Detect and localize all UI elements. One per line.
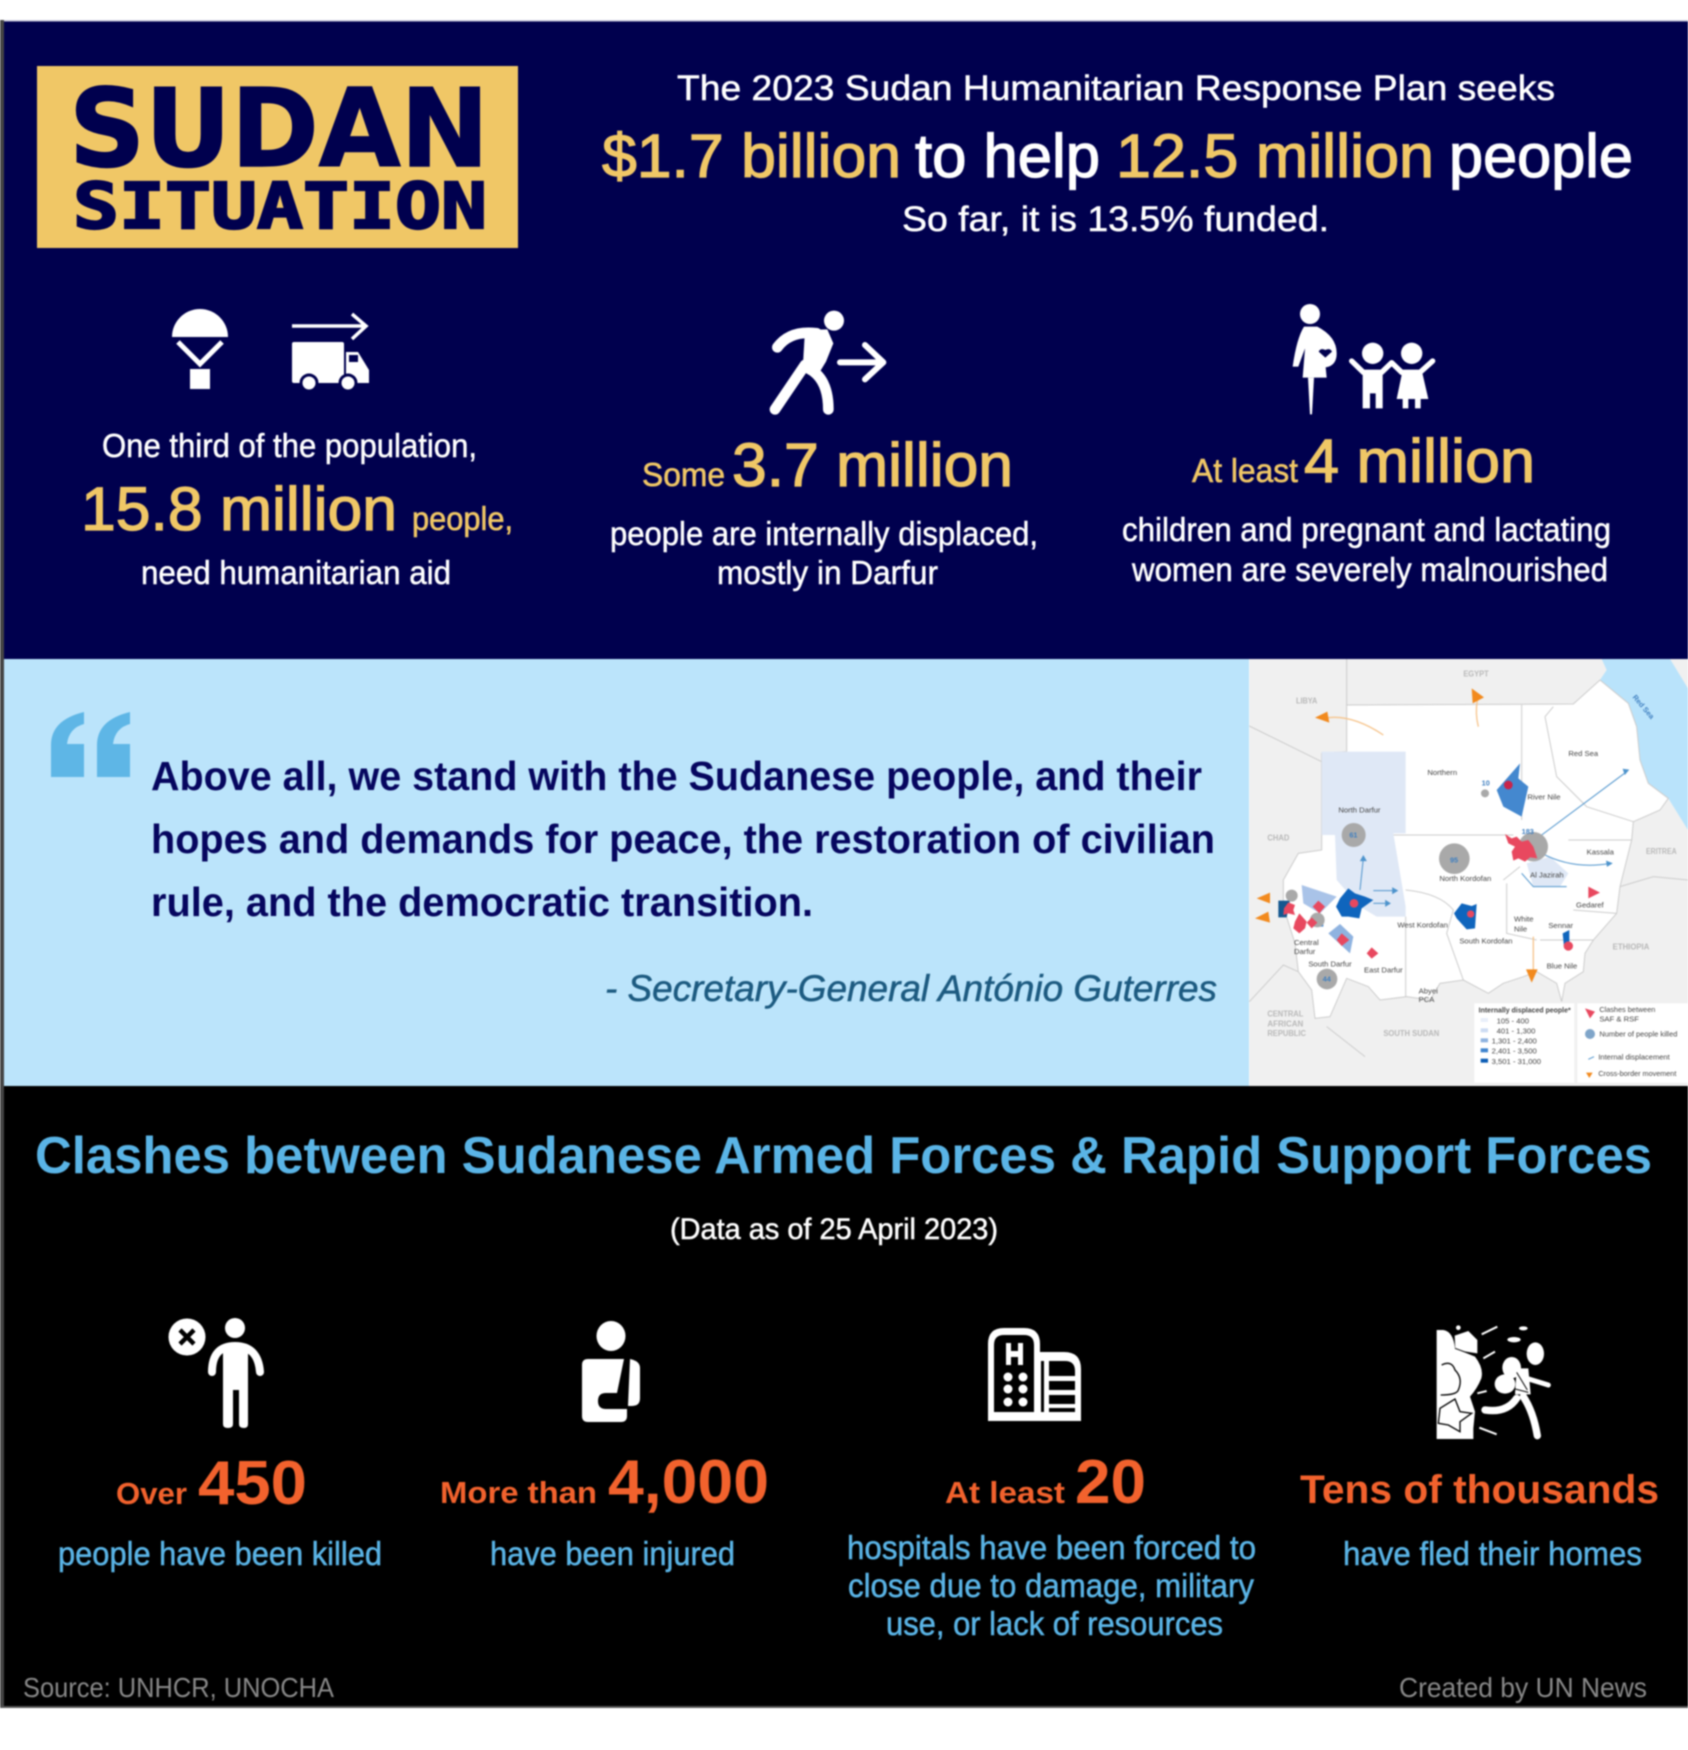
stat: internally displaced: Some [642, 456, 725, 493]
map: labels: 44 [1323, 975, 1332, 984]
map: internal displacement arrows [1360, 769, 1628, 906]
stat: people in need: need humanitarian aid [141, 554, 451, 591]
map: labels: North Darfur [1338, 806, 1381, 815]
map: labels: East Darfur [1364, 966, 1403, 975]
stat: fled homes: Tens of thousands [1300, 1468, 1659, 1512]
map: labels: REPUBLIC [1267, 1029, 1306, 1038]
icon: person fleeing explosion [1437, 1325, 1548, 1439]
funding headline: The 2023 Sudan Humanitarian Response Plan seeks [677, 69, 1555, 108]
map: legend: 105 - 400 [1497, 1016, 1529, 1025]
stat: malnutrition [1122, 427, 1611, 588]
map: labels: Sennar [1548, 921, 1573, 930]
title badge [37, 66, 518, 248]
map: labels: ERITREA [1646, 847, 1677, 856]
map: labels [1267, 670, 1677, 1038]
funding headline: to help [915, 122, 1100, 190]
quote text [151, 753, 1215, 925]
stat: hospitals: At least [945, 1475, 1065, 1510]
stat: internally displaced: 3.7 million [732, 431, 1013, 499]
map: legend: SAF & RSF [1599, 1015, 1639, 1024]
map: legend: 401 - 1,300 [1497, 1027, 1535, 1036]
map: cross-border arrows [1255, 688, 1538, 983]
stat: fled homes: have fled their homes [1343, 1535, 1642, 1572]
stat: hospitals: 20 [1075, 1448, 1146, 1517]
stat: people in need [81, 427, 513, 591]
stat: fled homes [1300, 1468, 1659, 1572]
map: legend: 3,501 - 31,000 [1492, 1057, 1541, 1066]
funding headline [602, 69, 1633, 239]
title badge: SITUATION [73, 170, 487, 243]
map: labels: River Nile [1527, 792, 1561, 801]
title badge: SUDAN [69, 67, 489, 192]
stat: internally displaced: mostly in Darfur [717, 554, 938, 591]
icon: person killed [168, 1318, 260, 1428]
stat: injured: 4,000 [608, 1448, 769, 1517]
stat: hospitals [847, 1448, 1256, 1642]
map: labels: Gedaref [1576, 900, 1605, 909]
map of Sudan [1249, 659, 1688, 1087]
creator credit: Created by UN News [1399, 1672, 1647, 1703]
map: labels: CENTRAL [1267, 1010, 1303, 1019]
stat: killed: 450 [198, 1449, 307, 1518]
map: legend [1474, 1003, 1688, 1083]
icon: pregnant woman and children [1293, 304, 1433, 414]
stat: hospitals: close due to damage, military [848, 1567, 1254, 1604]
map: labels: Nile [1514, 925, 1527, 934]
map: labels: 183 [1522, 827, 1534, 836]
icon: injured person with sling [582, 1321, 640, 1422]
stat: malnutrition: children and pregnant and lactating [1122, 511, 1611, 548]
panel: clashes [0, 1086, 1688, 1708]
map: legend: 1,301 - 2,400 [1492, 1037, 1537, 1046]
map: labels: LIBYA [1296, 696, 1318, 705]
map: labels: SOUTH SUDAN [1383, 1029, 1440, 1038]
map: labels: Darfur [1294, 947, 1316, 956]
map: labels: EGYPT [1463, 670, 1489, 679]
map: legend: Number of people killed [1599, 1030, 1677, 1039]
map: people killed circles [1286, 789, 1548, 989]
stat: hospitals: use, or lack of resources [886, 1605, 1223, 1642]
map: labels: North Kordofan [1439, 874, 1491, 883]
map: labels: PCA [1419, 995, 1435, 1004]
map: labels: Abyei [1419, 986, 1438, 995]
map: labels: CHAD [1267, 833, 1290, 842]
icon: quotation mark [51, 712, 130, 777]
stat: people in need: people, [412, 500, 513, 537]
map: labels: West Kordofan [1397, 920, 1448, 929]
map: legend: Clashes between [1599, 1005, 1655, 1014]
map: legend: 2,401 - 3,500 [1492, 1047, 1537, 1056]
map: labels: Blue Nile [1547, 961, 1577, 970]
map: legend: Internally displaced people* [1479, 1006, 1571, 1015]
map: labels: Kassala [1587, 847, 1615, 856]
map: labels: AFRICAN [1267, 1020, 1304, 1029]
map: labels: 95 [1450, 856, 1458, 865]
map: labels: 61 [1349, 830, 1357, 839]
stat: internally displaced [610, 431, 1038, 591]
funding headline: $1.7 billion [602, 122, 901, 190]
stat: hospitals: hospitals have been forced to [847, 1529, 1256, 1566]
stat: internally displaced: people are internally displaced, [610, 515, 1038, 552]
map: labels: Red Sea [1568, 749, 1599, 758]
map: labels: South Darfur [1308, 960, 1352, 969]
map: clash markers [1283, 781, 1600, 959]
map: legend: Internal displacement [1598, 1052, 1671, 1061]
quote text: Above all, we stand with the Sudanese people, and their [151, 753, 1202, 799]
stat: malnutrition: At least [1192, 452, 1298, 489]
icon: displaced person running [775, 311, 883, 409]
stat: people in need: One third of the population, [102, 427, 477, 464]
data date: (Data as of 25 April 2023) [670, 1213, 998, 1246]
panel: funding and needs [0, 20, 1688, 659]
quote attribution: - Secretary-General António Guterres [605, 968, 1217, 1009]
map: labels: Central [1294, 938, 1319, 947]
quote text: rule, and the democratic transition. [151, 879, 813, 925]
stat: killed [58, 1449, 382, 1572]
stat: injured: More than [440, 1475, 597, 1510]
quote text: hopes and demands for peace, the restoration of civilian [151, 816, 1215, 862]
stat: injured [440, 1448, 769, 1572]
funding headline: So far, it is 13.5% funded. [902, 200, 1329, 239]
map: labels: White [1514, 915, 1534, 924]
stat: malnutrition: women are severely malnourished [1131, 551, 1608, 588]
stat: malnutrition: 4 million [1304, 427, 1535, 495]
funding headline: 12.5 million [1116, 122, 1434, 190]
map: legend: Cross-border movement [1598, 1069, 1677, 1078]
map: labels: 10 [1482, 778, 1490, 787]
icon: delivery truck [292, 314, 369, 391]
icon: hospital [988, 1328, 1081, 1421]
clashes heading: Clashes between Sudanese Armed Forces & Rapid Support Forces [35, 1127, 1652, 1185]
stat: killed: people have been killed [58, 1535, 382, 1572]
stat: people in need: 15.8 million [81, 475, 397, 543]
icon: parachute aid drop [172, 309, 228, 389]
map: labels: South Kordofan [1459, 936, 1513, 945]
stat: killed: Over [116, 1476, 187, 1511]
map: labels: Al Jazirah [1530, 870, 1564, 879]
map: displacement areas [1278, 763, 1569, 947]
panel: quote [0, 659, 1249, 1087]
stat: injured: have been injured [490, 1535, 735, 1572]
map: labels: Northern [1427, 768, 1457, 777]
funding headline: people [1449, 122, 1633, 190]
source credit: Source: UNHCR, UNOCHA [23, 1672, 334, 1703]
map: labels: Red Sea [1631, 693, 1657, 722]
map: Sudan outline [1283, 680, 1668, 1018]
map: labels: ETHIOPIA [1613, 942, 1650, 951]
